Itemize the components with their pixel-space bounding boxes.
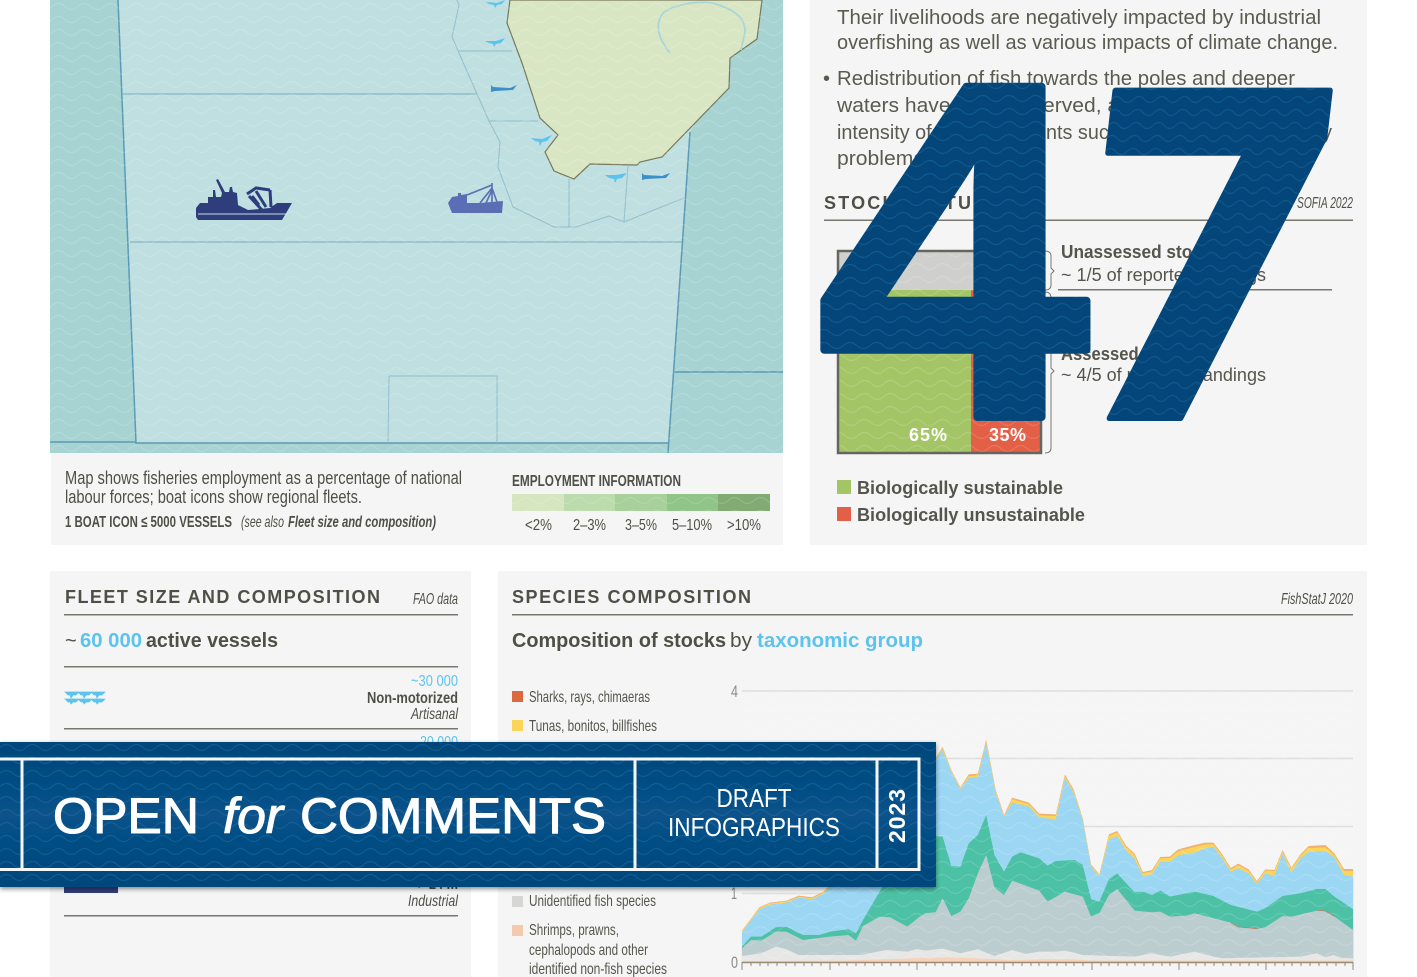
legend: employment information xyxy=(512,473,770,534)
heading: stock status: SOFIA 2022 xyxy=(1297,195,1353,212)
body text xyxy=(823,7,1338,170)
stacked area chart: 0 xyxy=(731,953,738,972)
caption text: Map shows fisheries employment as a percentage of national xyxy=(65,468,462,488)
legend: sustainability: Biologically sustainable xyxy=(857,478,1063,498)
heading: species composition: SPECIES COMPOSITION xyxy=(512,587,751,607)
heading: fleet size: FAO data xyxy=(413,591,458,608)
legend: employment information: >10% xyxy=(727,517,761,534)
x axis xyxy=(719,962,1358,977)
chart subtitle: Composition of stocks xyxy=(512,630,726,652)
row: non-motorized: ~30 000 xyxy=(411,673,458,690)
body text: intensity of extreme events such as storms is particularly xyxy=(837,122,1332,144)
legend: employment information: EMPLOYMENT INFORMATION xyxy=(512,473,681,490)
body text: waters have been observed, and the frequency and xyxy=(836,95,1317,117)
chart subtitle: taxonomic group xyxy=(757,630,923,652)
row: non-motorized: Artisanal xyxy=(410,706,458,723)
icon: industrial vessel xyxy=(196,179,292,220)
row: industrial xyxy=(408,876,458,910)
legend: employment information: 2–3% xyxy=(573,517,606,534)
heading: fleet size xyxy=(64,587,458,616)
row: industrial: Industrial xyxy=(408,893,458,910)
legend: employment information: <2% xyxy=(525,517,552,534)
braces xyxy=(1045,251,1054,453)
stacked bar chart: 65% xyxy=(909,425,947,445)
maritime boundaries xyxy=(50,0,783,453)
active vessels total: ~ xyxy=(65,630,77,652)
legend: sustainability xyxy=(837,478,1085,525)
caption text: 1 BOAT ICON ≤ 5000 VESSELS xyxy=(65,514,232,531)
land xyxy=(507,0,762,179)
banner year: 2023 xyxy=(884,789,910,843)
caption text: Fleet size and composition) xyxy=(288,514,436,531)
body text: problematic. xyxy=(837,148,952,170)
chart legend xyxy=(512,689,667,977)
active vessels total: 60 000 xyxy=(80,630,142,652)
caption text xyxy=(65,468,462,531)
chart legend: cephalopods and other xyxy=(529,942,648,959)
chart legend: Shrimps, prawns, xyxy=(529,922,619,939)
icon: motorised boats xyxy=(491,85,670,180)
stacked area chart xyxy=(731,682,1353,972)
banner: open for comments xyxy=(0,742,936,887)
banner subtitle: DRAFT xyxy=(716,783,792,813)
banner title: OPEN xyxy=(53,788,199,844)
caption text: (see also xyxy=(241,514,284,531)
river xyxy=(658,2,745,53)
row: non-motorized xyxy=(367,673,458,723)
heading: stock status xyxy=(824,193,1353,221)
banner subtitle xyxy=(668,783,840,842)
row: next fleet count: 20 000 xyxy=(420,734,458,751)
icon: semi-industrial vessel xyxy=(448,183,503,213)
caption text: labour forces; boat icons show regional fleets. xyxy=(65,487,362,507)
row: industrial: > 24 m xyxy=(418,876,458,893)
legend: sustainability: Biologically unsustainable xyxy=(857,505,1085,525)
heading: stock status: STOCK STATUS xyxy=(824,193,987,213)
heading: fleet size: FLEET SIZE AND COMPOSITION xyxy=(65,587,380,607)
big issue number 47 xyxy=(817,0,1372,524)
stacked bar chart xyxy=(838,251,1041,453)
stock labels: Unassessed stocks xyxy=(1061,242,1221,262)
stock labels: ~ 4/5 of reported landings xyxy=(1061,365,1266,385)
chart legend: Tunas, bonitos, billfishes xyxy=(529,718,657,735)
stacked area chart: 1 xyxy=(731,884,737,903)
stock labels: ~ 1/5 of reported landings xyxy=(1061,265,1266,285)
banner title xyxy=(53,788,606,844)
chart subtitle xyxy=(512,630,923,652)
active vessels total: active vessels xyxy=(146,630,278,652)
icon: artisanal boats xyxy=(485,0,627,183)
banner title: COMMENTS xyxy=(300,788,606,844)
panel: species composition xyxy=(498,571,1367,977)
chart legend: Unidentified fish species xyxy=(529,893,656,910)
active vessels total xyxy=(65,630,278,652)
body text: overfishing as well as various impacts of climate change. xyxy=(837,32,1338,54)
heading: species composition xyxy=(512,587,1353,616)
chart legend: Sharks, rays, chimaeras xyxy=(529,689,650,706)
legend: employment information: 5–10% xyxy=(672,517,712,534)
body text: Their livelihoods are negatively impacted by industrial xyxy=(837,7,1321,29)
heading: species composition: FishStatJ 2020 xyxy=(1281,591,1353,608)
icon: non-motorized boats xyxy=(65,692,105,704)
panel: map xyxy=(50,0,783,453)
panel: stock status and text xyxy=(810,0,1367,545)
icon: industrial boat xyxy=(64,884,118,893)
big issue number 47: 7 xyxy=(1039,2,1372,524)
body text: • xyxy=(823,68,830,90)
stock labels xyxy=(1058,242,1332,385)
legend: employment information: 3–5% xyxy=(625,517,657,534)
body text: Redistribution of fish towards the poles and deeper xyxy=(837,68,1295,90)
banner title: for xyxy=(223,788,285,844)
banner subtitle: INFOGRAPHICS xyxy=(668,812,840,842)
stacked bar chart: 35% xyxy=(989,425,1026,445)
panel: fleet size and composition xyxy=(50,571,471,977)
stock labels: Assessed stocks xyxy=(1061,344,1196,364)
row: non-motorized: Non-motorized xyxy=(367,690,458,707)
stacked area chart: 4 xyxy=(731,682,738,701)
panel: map caption xyxy=(51,453,783,545)
banner frame xyxy=(0,759,919,870)
chart subtitle: by xyxy=(730,630,752,652)
